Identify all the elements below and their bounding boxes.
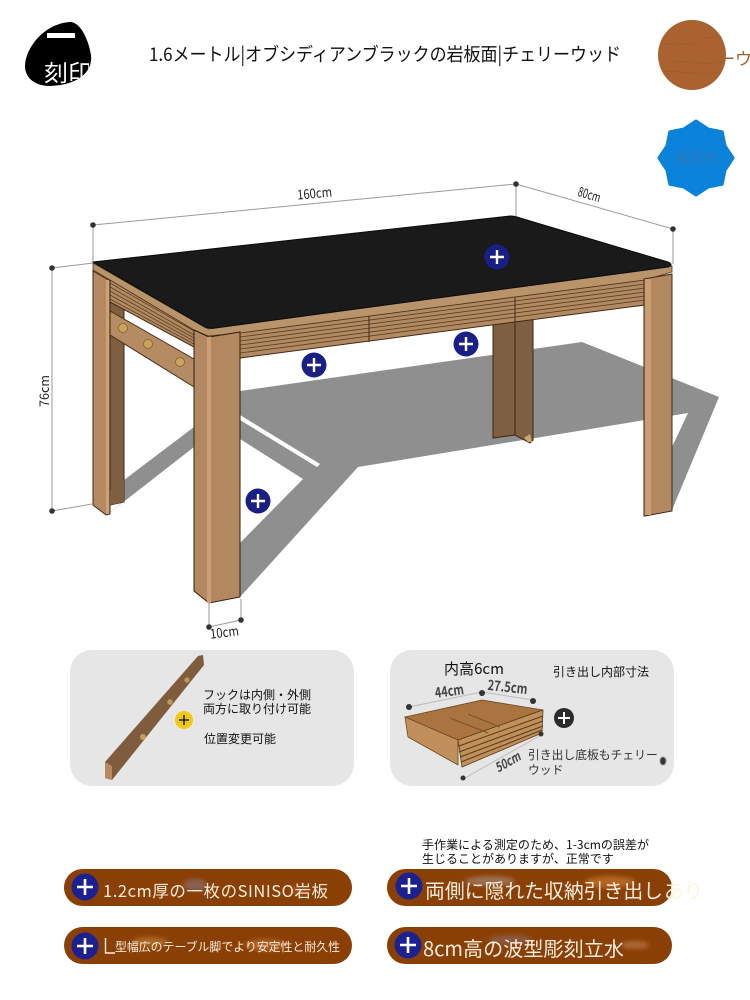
hook rail on table [110, 311, 194, 387]
hook rail bar [105, 655, 204, 780]
drawer dimension lines [406, 690, 544, 780]
icon: dark plus [554, 708, 574, 728]
table illustration [93, 216, 719, 603]
back leg [493, 316, 533, 443]
hotspot: leg [246, 488, 270, 514]
table edge strip [93, 263, 672, 336]
label: 44cm: 44cm [434, 679, 465, 703]
drawer illustration [405, 700, 543, 767]
hook rail note: 位置変更可能 [204, 730, 276, 747]
label: 160cm: 160cm [296, 181, 333, 204]
label: 80cm: 80cm [576, 181, 603, 206]
drawer note: 引き出し底板もチェリー [528, 746, 658, 763]
dimension dots [49, 181, 676, 630]
floor shadow [240, 342, 719, 597]
front apron with grooves [240, 279, 645, 358]
smudge [660, 757, 666, 765]
right leg [644, 274, 672, 516]
hotspot: tabletop [484, 244, 510, 270]
title: 1.6メートル|オブシディアンブラックの岩板面|チェリーウッド [149, 41, 621, 67]
feature pill: hidden drawers: 両側に隠れた収納引き出し [425, 875, 663, 904]
panel: drawer [390, 650, 674, 786]
swatch: blue badge: 無垢材 [675, 148, 717, 168]
panel: hook rail [70, 650, 354, 786]
feature pill: wave carving [387, 927, 672, 964]
feature pill: hidden drawers: あり [664, 875, 703, 904]
measurement note: 生じることがありますが、正常です [422, 850, 614, 867]
feature pill: L-shaped leg [64, 927, 352, 964]
badge: black egg 一刻印: 刻印 [44, 54, 92, 88]
side apron with grooves [110, 279, 194, 347]
feature pill: hidden drawers [387, 869, 703, 906]
hook rail note: 両方に取り付け可能 [203, 700, 311, 717]
left shadow band [108, 427, 194, 514]
label: 50cm: 50cm [491, 746, 525, 776]
label: 76cm: 76cm [34, 375, 53, 407]
drawer inner height label: 内高6cm [444, 658, 504, 679]
swatch: blue badge [660, 122, 732, 194]
left leg [93, 271, 124, 515]
feature pill: wave carving: 8cm高の波型彫刻立水 [423, 933, 624, 962]
label: 27.5cm: 27.5cm [487, 675, 528, 699]
front leg [194, 330, 240, 603]
hook rail note: フックは内側・外側 [203, 686, 311, 703]
drawer size heading: 引き出し内部寸法 [553, 663, 649, 680]
icon: yellow plus [175, 711, 193, 729]
hotspot: apron [302, 352, 326, 378]
badge: black egg 一刻印 [25, 22, 92, 88]
feature pill: stone top [64, 869, 352, 906]
hotspot: drawer [454, 332, 478, 356]
measurement note: 手作業による測定のため、1-3cmの誤差が [422, 836, 649, 853]
swatch: cherry wood [658, 20, 750, 90]
black tabletop [93, 216, 671, 328]
left leg inner face [110, 300, 124, 505]
dimension lines [52, 184, 673, 627]
feature pill: L-shaped leg: 型幅広のテーブル脚でより安定性と耐久性 [115, 938, 340, 955]
drawer note: ウッド [528, 761, 563, 778]
label: 10cm: 10cm [209, 620, 240, 643]
feature pill: stone top: 1.2cm厚の一枚のSINISO岩板 [103, 878, 328, 902]
